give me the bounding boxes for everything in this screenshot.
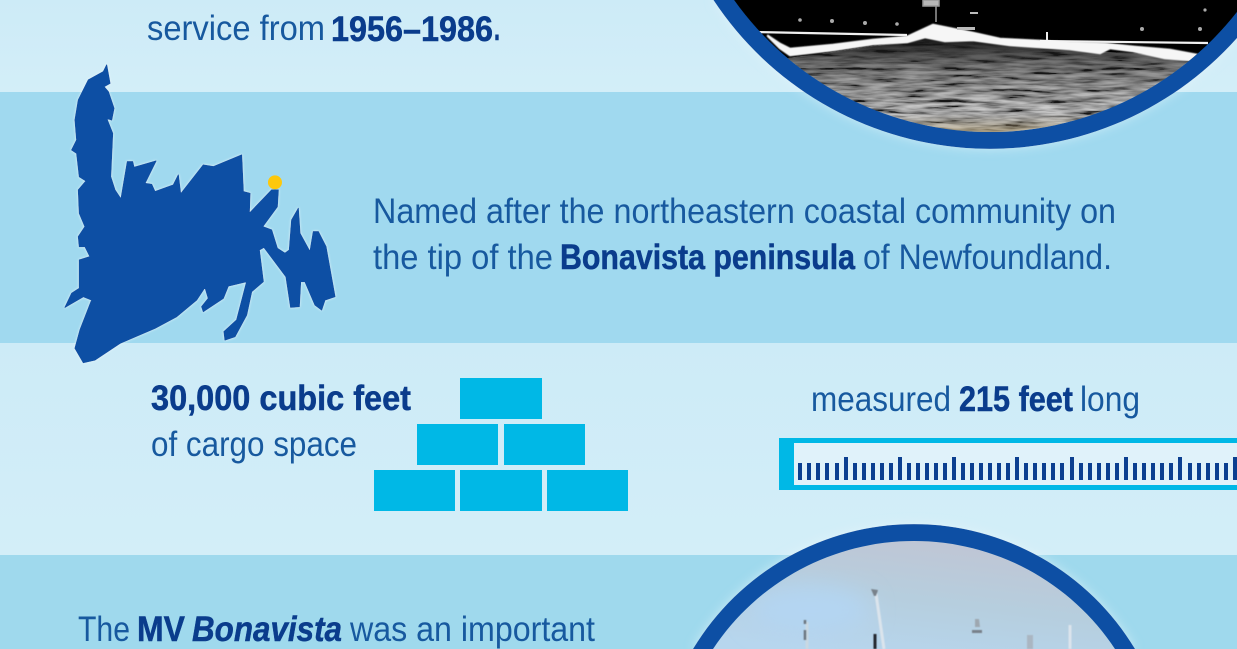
icon: map of Newfoundland with Bonavista marker <box>65 65 335 363</box>
text: cargo space: of cargo space <box>151 425 357 464</box>
text: years of service: 1956–1986 <box>331 10 493 49</box>
background band: cargo and length section <box>0 343 1237 555</box>
background band: bottom section <box>0 555 1237 649</box>
text: cargo space: 30,000 cubic feet <box>151 379 411 418</box>
text: length: measured <box>811 380 951 419</box>
text: named after <box>373 192 1116 277</box>
text: length: long <box>1080 380 1140 419</box>
map outline <box>65 65 335 363</box>
text: years of service <box>147 9 500 49</box>
text: length: 215 feet <box>959 380 1073 419</box>
water <box>788 40 1190 132</box>
text: important vessel <box>78 610 595 649</box>
background band: map section <box>0 92 1237 343</box>
horizon and foam <box>755 32 1208 43</box>
text: cargo space <box>151 379 411 464</box>
text: named after: of Newfoundland. <box>863 238 1112 277</box>
text: years of service: service from <box>147 9 325 48</box>
icon: ruler <box>779 438 1237 490</box>
text: years of service: . <box>494 9 500 48</box>
text: important vessel: was an important <box>349 610 595 649</box>
text: important vessel: MV <box>137 610 186 649</box>
icon: stacked cargo bricks <box>374 378 628 511</box>
text: important vessel: The <box>78 610 130 649</box>
text: important vessel: Bonavista <box>192 610 342 649</box>
background band: top light <box>0 0 1237 92</box>
text: named after: Named after the northeastern coastal community on <box>373 192 1116 231</box>
marker: Bonavista <box>268 175 282 189</box>
text: length <box>811 380 1140 419</box>
photo: ship masts in circular frame <box>693 524 1135 649</box>
photo: ship at sea in circular frame <box>714 0 1237 149</box>
text: named after: the tip of the <box>373 238 553 277</box>
text: named after: Bonavista peninsula <box>560 238 855 277</box>
